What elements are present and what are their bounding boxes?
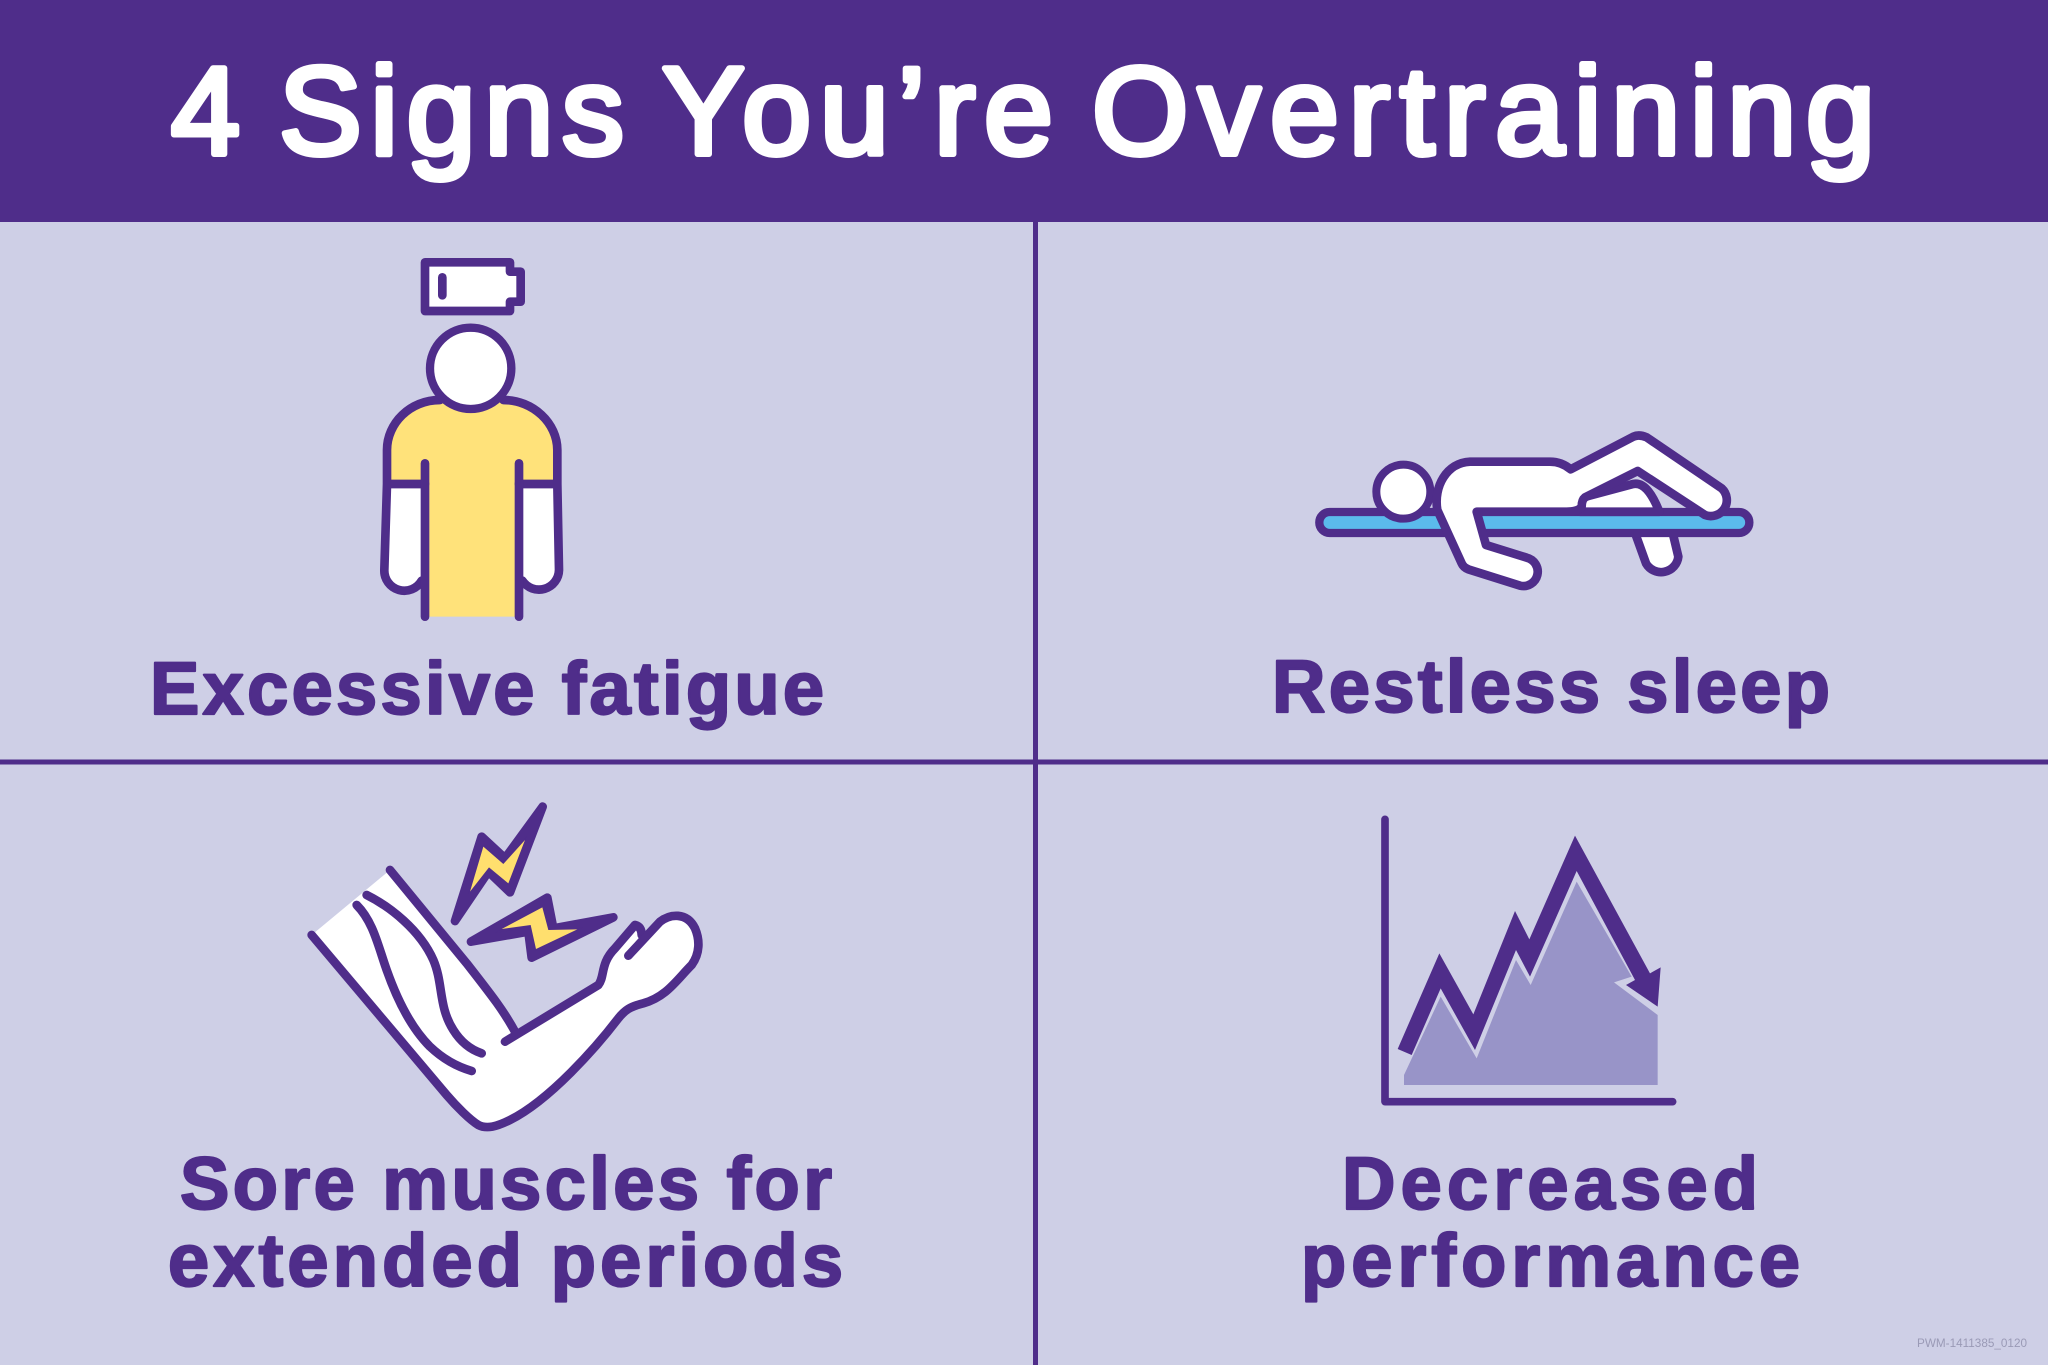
title: Overtraining (1092, 43, 1875, 181)
label: decreased performance (1301, 1142, 1800, 1302)
icon: sore arm with lightning bolts (312, 807, 698, 1127)
icon: tired person with low battery (384, 262, 559, 617)
icon: low battery (425, 262, 521, 311)
label: decreased performance: performance (1301, 1219, 1800, 1302)
label: sore muscles for extended periods: extended periods (168, 1219, 843, 1302)
title: Signs (279, 43, 624, 181)
footer reference code: PWM-1411385_0120 (1917, 1338, 2027, 1350)
panel: sore muscles (0, 762, 1035, 1365)
panel: excessive fatigue (0, 222, 1035, 762)
title: 4 (171, 43, 240, 181)
title (171, 43, 1875, 181)
label: sore muscles for extended periods: Sore muscles for (180, 1142, 832, 1225)
icon: declining area chart with arrow (1385, 819, 1673, 1102)
title: You’re (662, 43, 1053, 181)
panel: decreased performance (1035, 762, 2048, 1365)
label: sore muscles for extended periods (168, 1142, 843, 1302)
label: decreased performance: Decreased (1342, 1142, 1758, 1225)
icon: upper lightning bolt (455, 807, 543, 921)
header banner (0, 0, 2048, 222)
icon: person sprawled on a mat (1319, 435, 1749, 586)
panel: restless sleep (1035, 222, 2048, 762)
label: excessive fatigue: Excessive fatigue (150, 647, 824, 730)
label: restless sleep: Restless sleep (1272, 645, 1830, 728)
icon: lower lightning bolt (471, 898, 613, 958)
